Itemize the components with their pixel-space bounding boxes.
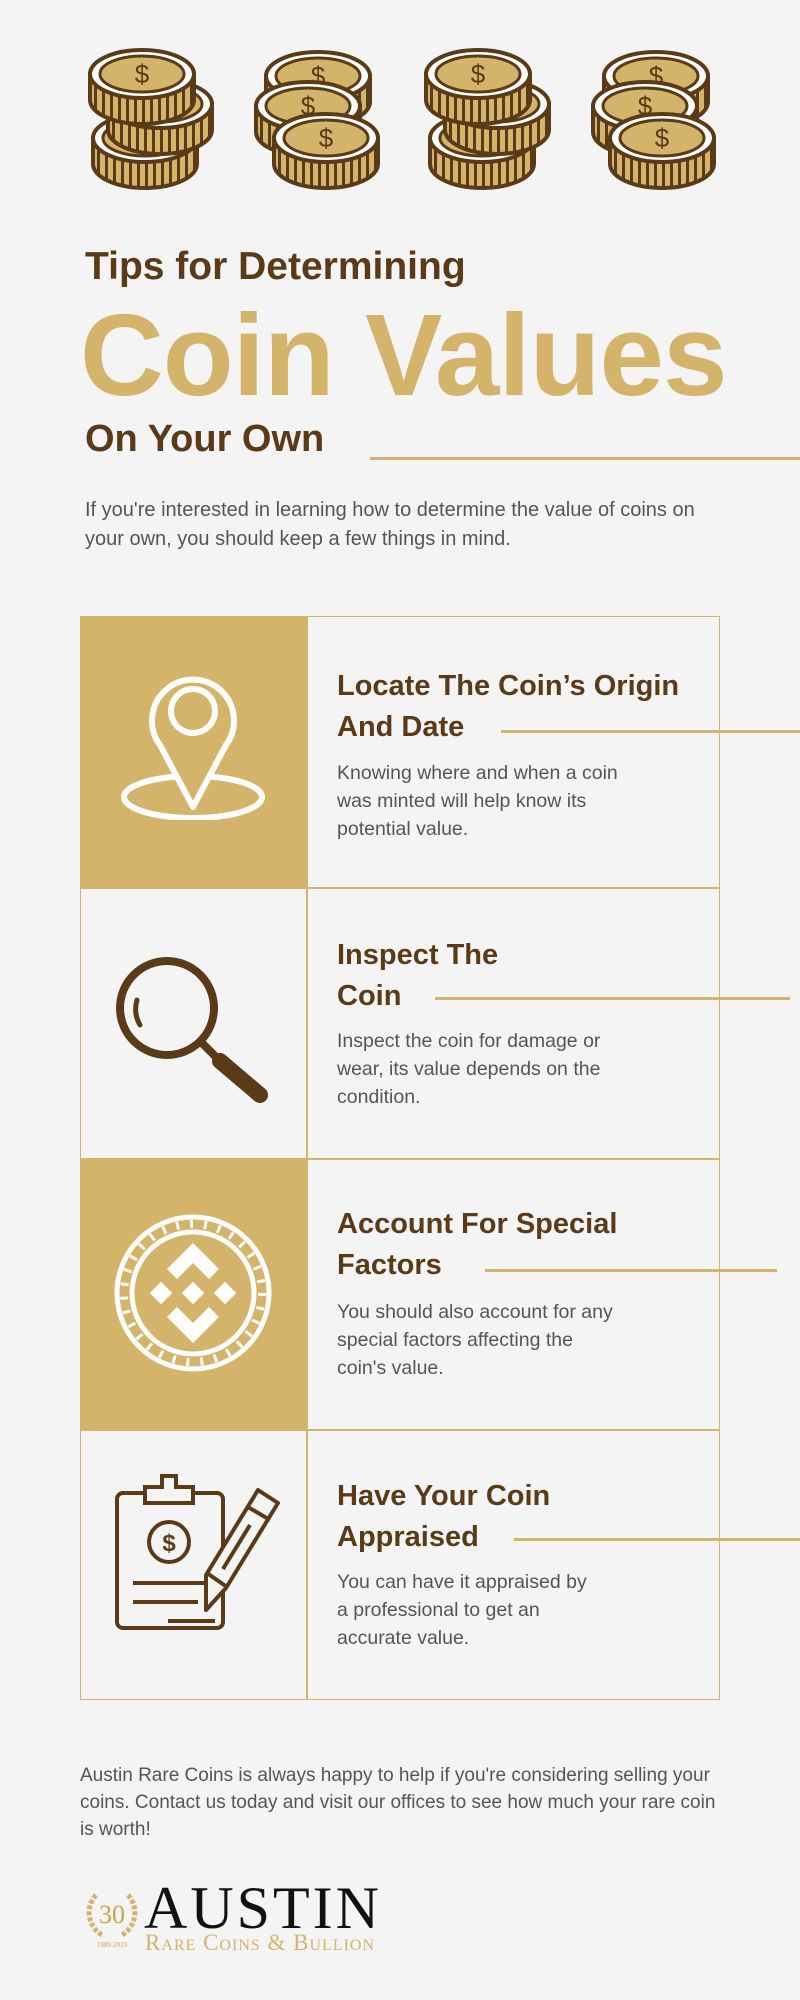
heading: Factors [337, 1249, 442, 1281]
logo wordmark: AUSTIN [144, 1875, 382, 1941]
logo badge [86, 1893, 138, 1949]
title: tips for determining: Tips for Determining [85, 245, 466, 288]
coin stacks [88, 48, 716, 190]
stack 3 [426, 50, 549, 188]
logo [86, 1875, 382, 1955]
stack 2 [256, 52, 378, 188]
heading: Locate The Coin’s Origin [337, 670, 679, 702]
description: Knowing where and when a coin was minted will help know its potential value. [337, 762, 618, 840]
description: You should also account for any special factors affecting the coin's value. [337, 1301, 613, 1379]
icon: clipboard with pencil: $ [162, 1530, 176, 1557]
icon: special coin [114, 1214, 272, 1372]
logo badge: 1989-2019 [97, 1941, 128, 1949]
icon: location pin [121, 676, 265, 820]
description: You can have it appraised by a professional to get an accurate value. [337, 1571, 587, 1649]
description: Inspect the coin for damage or wear, its value depends on the condition. [337, 1030, 600, 1108]
heading [337, 1208, 617, 1281]
icon: clipboard with pencil [115, 1474, 280, 1630]
heading: Inspect The [337, 939, 498, 971]
tip 1 [337, 670, 800, 840]
tip 3 [337, 1208, 777, 1379]
logo badge: 30 [99, 1900, 125, 1929]
title: on your own: On Your Own [85, 418, 324, 460]
tip 4 [337, 1480, 800, 1649]
footer text: Austin Rare Coins is always happy to help if you're considering selling your coins. Contact us today and visit our offices to see how much your rare coin is worth! [80, 1765, 715, 1840]
heading: Account For Special [337, 1208, 617, 1240]
heading: And Date [337, 711, 464, 743]
heading: Coin [337, 980, 401, 1012]
panel backgrounds [80, 616, 306, 887]
heading [337, 1480, 550, 1553]
intro text: If you're interested in learning how to determine the value of coins on your own, you should keep a few things in mind. [85, 499, 695, 550]
heading: Appraised [337, 1521, 479, 1553]
title: coin values: Coin Values [80, 290, 727, 420]
stack 1 [90, 50, 212, 188]
heading: Have Your Coin [337, 1480, 550, 1512]
icon: magnifier [116, 957, 268, 1103]
stack 4 [593, 52, 714, 188]
heading [337, 670, 679, 743]
heading [337, 939, 498, 1012]
logo: Rare Coins & Bullion [145, 1930, 375, 1955]
tip 2 [337, 939, 790, 1108]
tips table [80, 616, 720, 1700]
